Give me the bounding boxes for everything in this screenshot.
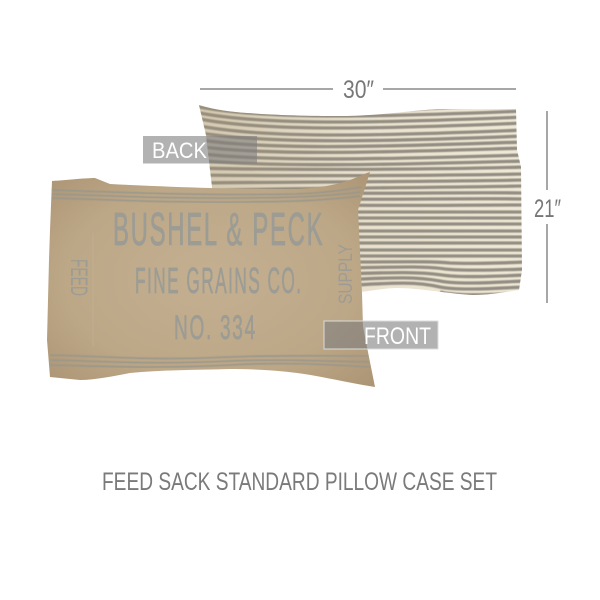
front label: FRONT <box>364 323 431 350</box>
height dimension: 21 inches: 21″ <box>534 195 561 223</box>
back pillow case: ticking stripes <box>190 100 530 300</box>
infographic <box>47 80 561 490</box>
top grain stripes <box>52 187 362 202</box>
sack print: Supply: SUPPLY <box>336 244 357 304</box>
front pillow case: feed sack <box>47 172 375 387</box>
back label <box>143 136 257 164</box>
sack print: Feed: FEED <box>65 259 92 296</box>
front label <box>324 321 438 350</box>
pillow seam <box>92 233 94 347</box>
sack print: Bushel & Peck: BUSHEL & PECK <box>113 204 323 255</box>
back label: BACK <box>152 138 207 163</box>
width dimension: 30 inches: 30″ <box>343 76 374 104</box>
sack print: No. 334: NO. 334 <box>174 308 255 346</box>
bottom grain stripes <box>50 355 370 367</box>
sack print: Fine Grains Co.: FINE GRAINS CO. <box>135 260 301 301</box>
